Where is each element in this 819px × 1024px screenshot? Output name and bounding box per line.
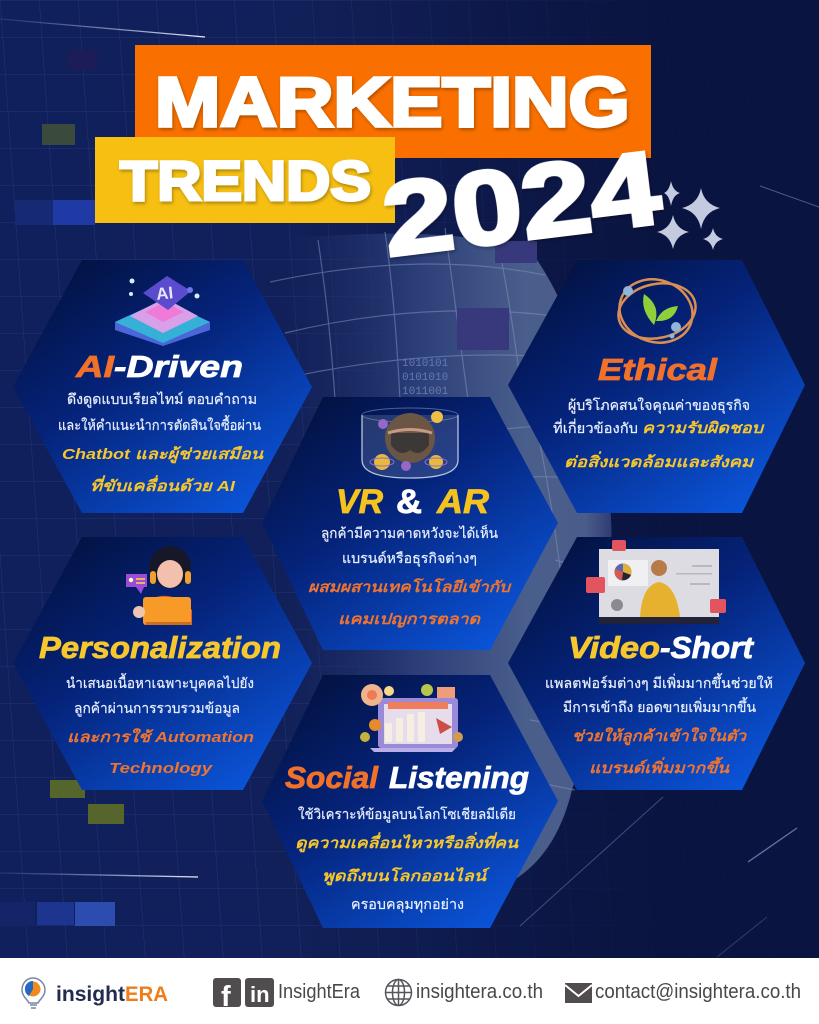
heading: Listening — [389, 760, 529, 795]
icon: sparkles — [657, 181, 723, 250]
body text: ช่วยให้ลูกค้าเข้าใจในตัว — [572, 727, 748, 746]
body text: นำเสนอเนื้อหาเฉพาะบุคคลไปยัง — [66, 673, 254, 692]
icon: insightERA bulb logo — [22, 978, 45, 1008]
body text: แพลตฟอร์มต่างๆ มีเพิ่มมากขึ้นช่วยให้ — [545, 673, 773, 691]
body text: และการใช้ Automation — [67, 728, 254, 746]
heading — [568, 630, 755, 665]
icon: linkedin: in — [250, 982, 270, 1007]
heading: Video — [568, 630, 660, 665]
icon: globe — [386, 980, 412, 1006]
title: Marketing Trends 2024 — [95, 45, 723, 278]
logo wordmark: insight — [56, 983, 125, 1006]
body text — [553, 397, 765, 471]
logo wordmark: ERA — [125, 983, 168, 1006]
panel: Ethical — [508, 260, 805, 513]
body text: ความรับผิดชอบ — [642, 420, 765, 437]
body text: ต่อสิ่งแวดล้อมและสังคม — [564, 451, 754, 471]
body text: ดูความเคลื่อนไหวหรือสิ่งที่คน — [295, 832, 519, 853]
body text: Technology — [109, 760, 213, 777]
body text: ที่เกี่ยวข้องกับ — [553, 419, 638, 436]
icon: person with laptop — [126, 546, 192, 625]
panel: Personalization — [13, 537, 312, 790]
panel: Social Listening — [262, 675, 558, 928]
email: contact@insightera.co.th — [595, 981, 801, 1003]
body text — [545, 673, 773, 777]
body text: Chatbot และผู้ช่วยเสมือน — [62, 446, 264, 464]
body text: และให้คำแนะนำการตัดสินใจซื้อผ่าน — [58, 415, 261, 433]
icon: leaf orbit — [611, 270, 701, 352]
website: insightera.co.th — [416, 981, 543, 1003]
heading: Social — [285, 760, 379, 795]
body text: ดึงดูดแบบเรียลไทม์ ตอบคำถาม — [67, 391, 257, 408]
icon: facebook: f — [221, 981, 231, 1013]
body text: แบรนด์หรือธุรกิจต่างๆ — [342, 550, 477, 567]
icon: linkedin — [245, 978, 274, 1007]
icon: social laptop — [360, 684, 463, 752]
heading: AI — [75, 349, 116, 384]
body text: ผสมผสานเทคโนโลยีเข้ากับ — [308, 577, 512, 596]
icon: mail — [565, 983, 592, 1003]
icon: VR headset — [362, 408, 458, 478]
heading: -Driven — [114, 349, 243, 384]
heading — [75, 349, 243, 384]
icon: video presenter — [586, 540, 726, 624]
heading: Personalization — [39, 630, 281, 665]
body text: มีการเข้าถึง ยอดขายเพิ่มมากขึ้น — [563, 697, 756, 715]
body text — [308, 524, 512, 628]
icon: AI chip: AI — [155, 283, 174, 304]
panel: VR & AR — [262, 397, 558, 650]
heading: Ethical — [598, 352, 719, 387]
body text — [295, 806, 519, 913]
heading: & — [396, 483, 422, 521]
body text: ใช้วิเคราะห์ข้อมูลบนโลกโซเชียลมีเดีย — [298, 806, 516, 823]
background: 1010101 — [402, 358, 449, 370]
body text: ลูกค้ามีความคาดหวังจะได้เห็น — [321, 524, 498, 542]
heading: AR — [436, 483, 489, 521]
body text — [58, 391, 264, 495]
background: 1011001 — [402, 386, 449, 398]
panel: AI-Driven — [13, 260, 312, 513]
heading: MARKETING: MARKETING — [155, 63, 630, 141]
background: 0101010 — [402, 372, 448, 384]
icon: AI chip — [115, 276, 210, 346]
panel: Video-Short — [508, 537, 805, 790]
body text: ผู้บริโภคสนใจคุณค่าของธุรกิจ — [568, 397, 750, 414]
body text: ลูกค้าผ่านการรวบรวมข้อมูล — [74, 700, 240, 717]
heading: TRENDS: TRENDS — [120, 150, 371, 212]
yellow banner — [95, 137, 395, 223]
orange banner — [135, 45, 651, 158]
body text: แบรนด์เพิ่มมากขึ้น — [589, 756, 730, 777]
heading — [336, 483, 489, 521]
heading — [285, 760, 529, 795]
body text: ครอบคลุมทุกอย่าง — [351, 896, 464, 913]
heading: VR — [336, 483, 383, 521]
icon: facebook — [213, 978, 241, 1013]
logo wordmark — [56, 983, 168, 1006]
heading: 2024: 2024 — [377, 130, 666, 278]
body text: ที่ขับเคลื่อนด้วย AI — [90, 475, 236, 495]
heading: -Short — [660, 630, 755, 665]
handle: InsightEra — [278, 981, 361, 1003]
body text: พูดถึงบนโลกออนไลน์ — [322, 866, 491, 886]
body text — [66, 673, 254, 777]
body text: แคมเปญการตลาด — [338, 611, 481, 628]
footer bar — [0, 958, 819, 1024]
